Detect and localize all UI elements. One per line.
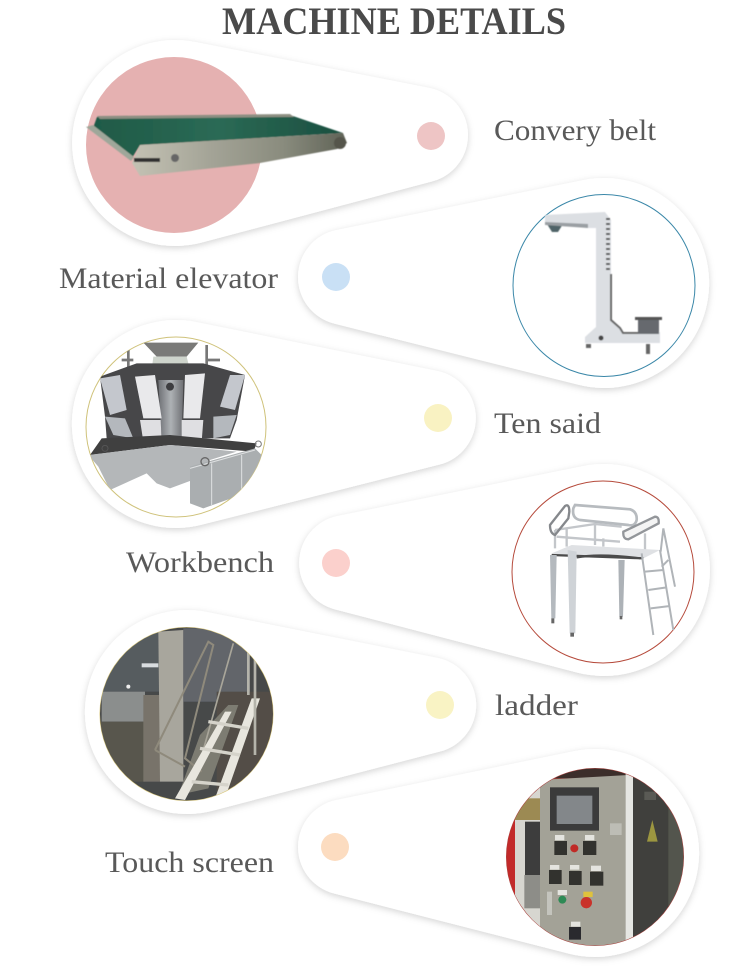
label: Convery belt bbox=[494, 114, 657, 147]
panel: material elevator bbox=[59, 178, 709, 388]
label: Touch screen bbox=[105, 846, 274, 879]
icon: workbench platform bbox=[550, 505, 675, 637]
teardrop card bbox=[298, 749, 699, 957]
teardrop card bbox=[85, 610, 476, 814]
teardrop card bbox=[72, 320, 476, 528]
icon: conveyor belt bbox=[86, 114, 347, 176]
label: ladder bbox=[495, 689, 578, 722]
icon: multihead weigher bbox=[88, 343, 267, 508]
panel: ladder bbox=[85, 610, 578, 814]
ring bbox=[512, 481, 694, 663]
dot bbox=[322, 263, 350, 291]
dot bbox=[424, 404, 452, 432]
panel: conveyor belt bbox=[72, 40, 657, 246]
ring bbox=[513, 194, 695, 376]
dot bbox=[417, 122, 445, 150]
ring bbox=[86, 337, 266, 517]
icon: ladder photo bbox=[98, 625, 275, 802]
label: Workbench bbox=[126, 546, 274, 579]
panel: ten said weigher bbox=[72, 320, 601, 528]
dot bbox=[321, 833, 349, 861]
label: Material elevator bbox=[59, 262, 278, 295]
panel: workbench bbox=[126, 464, 710, 676]
pink disc bbox=[86, 57, 262, 233]
dot bbox=[322, 549, 350, 577]
title: MACHINE DETAILS bbox=[222, 0, 566, 43]
teardrop card bbox=[72, 40, 468, 246]
ring bbox=[506, 768, 684, 946]
ring bbox=[100, 627, 274, 801]
panel: touch screen bbox=[105, 749, 699, 957]
icon: bucket elevator bbox=[545, 212, 662, 354]
label: Ten said bbox=[494, 407, 601, 440]
dot bbox=[426, 691, 454, 719]
teardrop card bbox=[298, 178, 709, 388]
teardrop card bbox=[299, 464, 710, 676]
icon: control panel photo bbox=[505, 765, 685, 948]
